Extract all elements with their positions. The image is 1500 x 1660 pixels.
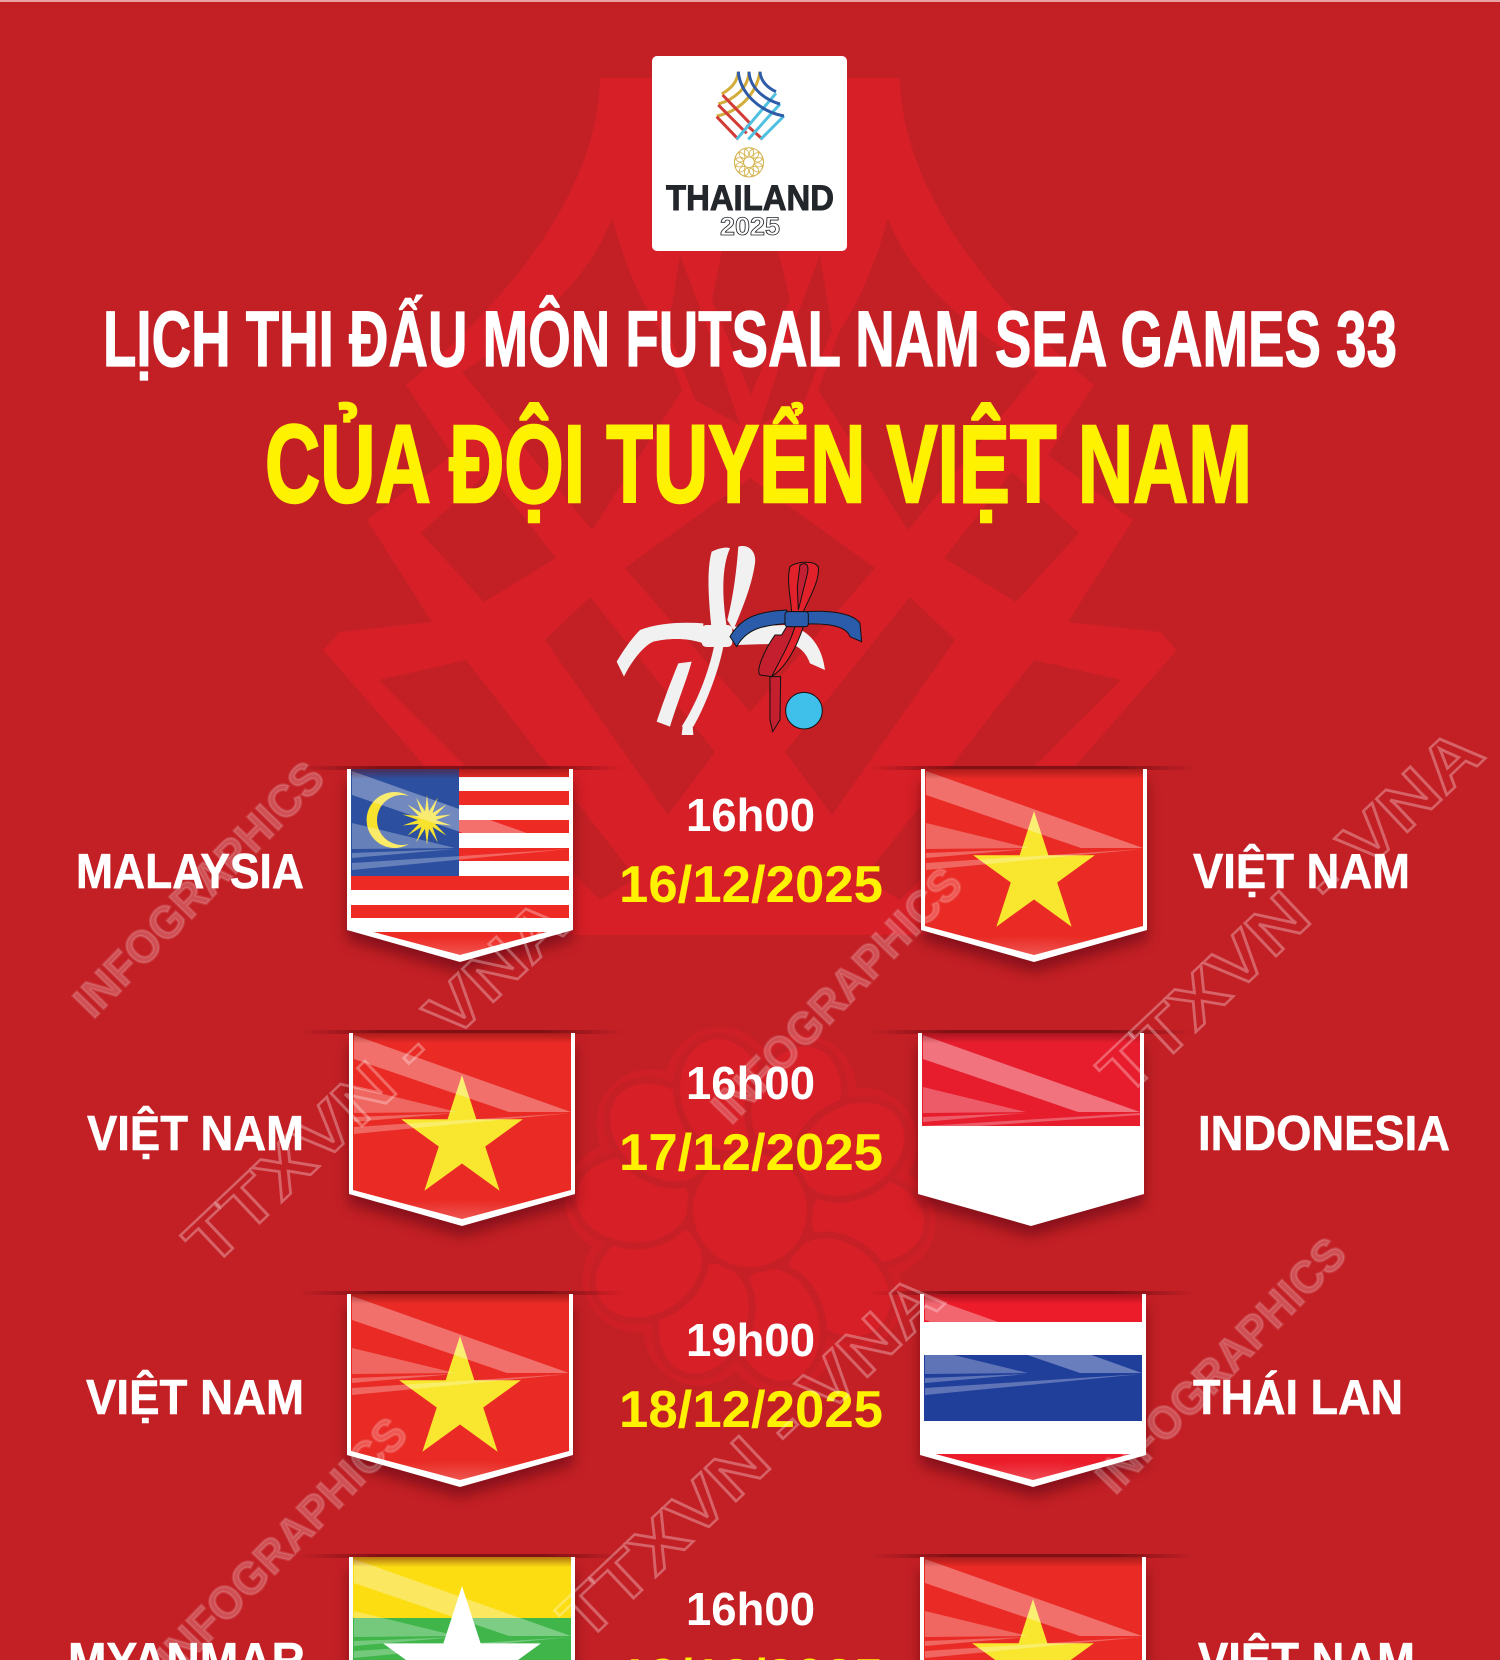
match 1: Malaysia vs Việt Nam — [76, 766, 1410, 972]
logo year: 2025 — [720, 213, 780, 241]
watermark: INFOGRAPHICS: INFOGRAPHICS — [701, 857, 972, 1133]
match date: 18/12/2025 — [619, 1381, 883, 1439]
team name: THÁI LAN — [1193, 1371, 1403, 1425]
background pattern: flower — [560, 1016, 940, 1404]
logo wordmark: THAILAND — [666, 179, 834, 218]
flag: Thái Lan — [870, 1291, 1196, 1497]
flag: Việt Nam — [870, 1554, 1196, 1660]
match 3: Việt Nam vs Thái Lan — [86, 1291, 1403, 1497]
team name: VIỆT NAM — [86, 1370, 304, 1425]
watermark: TTXVN - VNA: TTXVN - VNA — [170, 883, 582, 1279]
watermark: TTXVN - VNA: TTXVN - VNA — [544, 1258, 956, 1654]
match date: 17/12/2025 — [619, 1124, 883, 1182]
flag: Myanmar — [299, 1554, 625, 1660]
match 2: Việt Nam vs Indonesia — [87, 1030, 1450, 1236]
team name: INDONESIA — [1198, 1107, 1450, 1161]
flag: Malaysia — [297, 766, 623, 972]
flag: Indonesia — [868, 1030, 1194, 1236]
watermark: INFOGRAPHICS: INFOGRAPHICS — [63, 751, 334, 1027]
icon: roof strokes — [717, 72, 784, 139]
flag: Việt Nam — [297, 1291, 623, 1497]
watermark: TTXVN - VNA: TTXVN - VNA — [1084, 713, 1496, 1109]
background pattern: roof lattice — [323, 78, 1177, 935]
team name: VIỆT NAM — [1193, 844, 1410, 899]
watermark: TTXVN - VNA — [170, 713, 1496, 1654]
icon: gold flower — [734, 148, 764, 177]
team name: VIỆT NAM — [87, 1106, 304, 1161]
flag: Việt Nam — [299, 1030, 625, 1236]
team name: MALAYSIA — [76, 845, 304, 899]
match time: 19h00 — [686, 1314, 815, 1366]
match 4: Myanmar vs Việt Nam — [68, 1554, 1415, 1660]
logo: Thailand 2025 — [652, 56, 847, 251]
watermark: INFOGRAPHICS — [63, 751, 1356, 1660]
flag: Việt Nam — [871, 766, 1197, 972]
match date: 16/12/2025 — [619, 856, 883, 914]
match time: 16h00 — [686, 1057, 815, 1109]
match time: 16h00 — [686, 789, 815, 841]
icon: futsal mascot ribbons — [617, 546, 862, 735]
watermark: INFOGRAPHICS: INFOGRAPHICS — [1085, 1227, 1356, 1503]
match time: 16h00 — [686, 1583, 815, 1635]
